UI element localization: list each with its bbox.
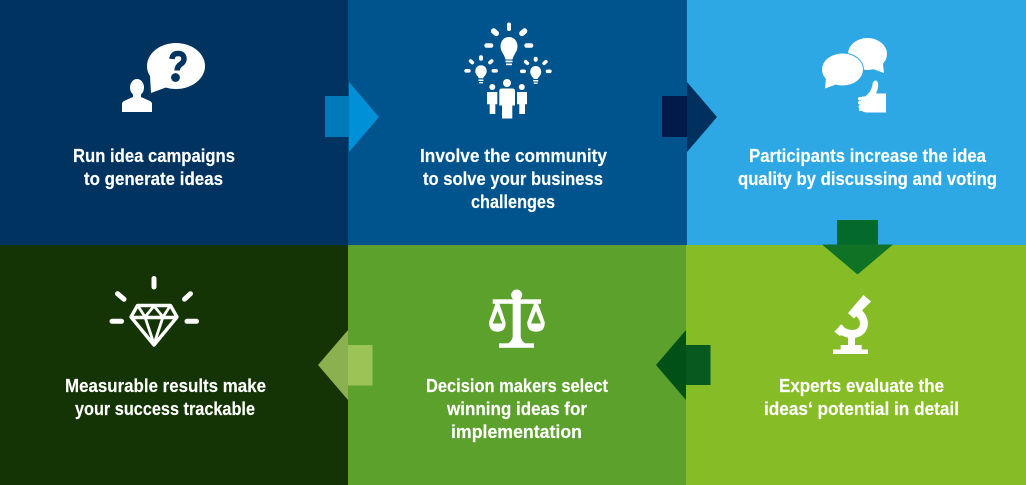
heading: run idea campaigns [73,146,235,189]
panel: measurable results [0,245,348,485]
panel: involve the community [348,0,687,245]
heading: experts evaluate [764,376,959,419]
icon: microscope [833,295,871,354]
heading: involve the community [420,146,607,212]
heading: involve the community: to solve your business [423,169,603,189]
arrow: step 2 to 3 [662,82,717,152]
heading: participants: Participants increase the idea [749,146,987,166]
heading: measurable results [65,376,266,419]
arrow: step 5 to 6 [318,330,372,400]
icon: light bulbs and people [464,22,552,118]
heading: participants [738,146,997,189]
heading: measurable results: Measurable results make [65,376,266,396]
arrow: step 3 to 4 [822,220,893,274]
heading: decision makers: winning ideas for [446,399,587,419]
icon: diamond with rays [112,278,196,345]
heading: decision makers [426,376,608,442]
panel: experts evaluate [686,245,1026,485]
panel: decision makers [348,245,686,485]
heading: involve the community: Involve the community [420,146,607,166]
heading: measurable results: your success trackable [75,399,255,419]
icon: speech bubbles and thumb up [821,38,887,112]
arrow: step 1 to 2 [325,82,379,152]
icon: scales [489,290,545,348]
heading: experts evaluate: ideas‘ potential in detail [764,399,959,419]
panel: participants discuss and vote [687,0,1026,245]
icon: person with question bubble [122,43,205,112]
heading: decision makers: implementation [451,422,582,442]
heading: participants: quality by discussing and voting [738,169,997,189]
heading: run idea campaigns: to generate ideas [84,169,223,189]
arrow: step 4 to 5 [656,330,710,400]
heading: run idea campaigns: Run idea campaigns [73,146,235,166]
heading: experts evaluate: Experts evaluate the [779,376,944,396]
panel: run idea campaigns [0,0,348,245]
heading: decision makers: Decision makers select [426,376,608,396]
heading: involve the community: challenges [471,192,555,212]
